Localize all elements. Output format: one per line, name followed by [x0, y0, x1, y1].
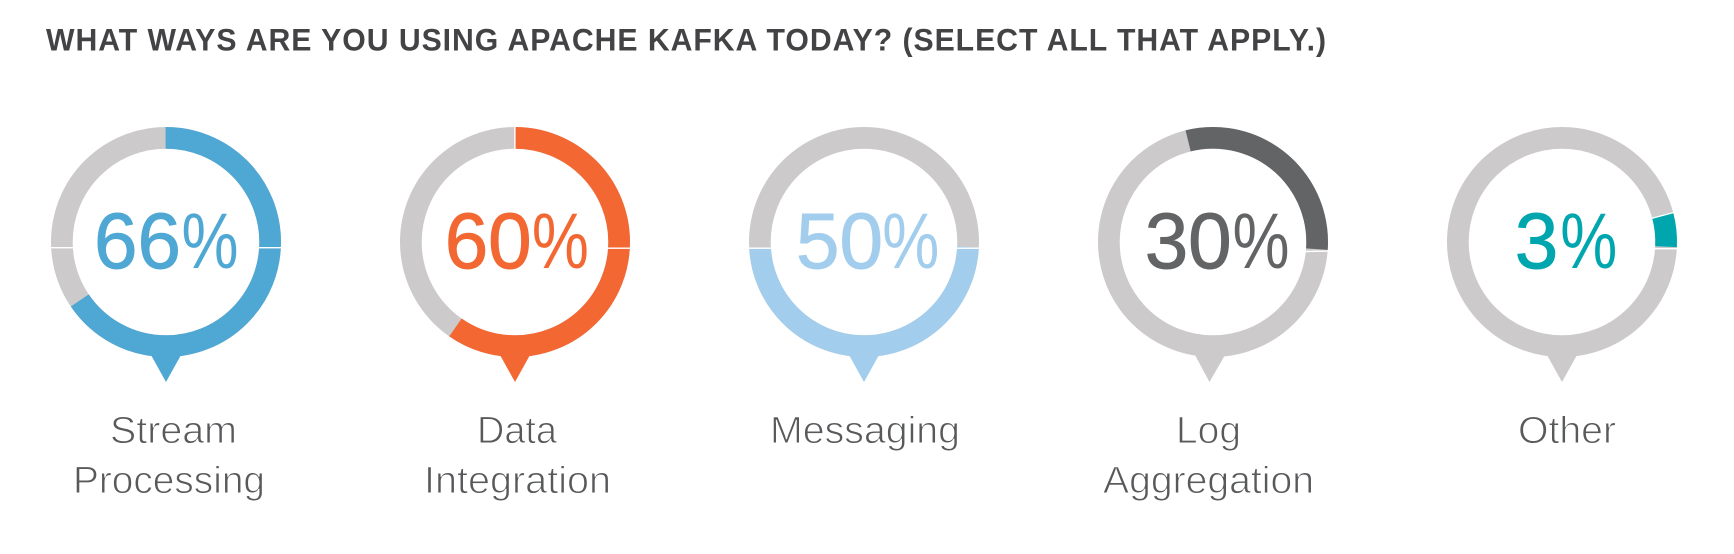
label: data integration: [424, 410, 611, 502]
value: 50%: %: [882, 196, 939, 285]
value: 60%: %: [532, 196, 589, 285]
value: 3%: 3: [1515, 196, 1558, 285]
pointer: other: [1547, 355, 1577, 382]
value: 50%: 50: [796, 196, 883, 285]
value: 30%: 30: [1145, 196, 1232, 285]
label: log aggregation: [1103, 410, 1314, 502]
donut: 30%: [1087, 116, 1339, 368]
value: 3%: [1515, 196, 1617, 285]
label: messaging: Messaging: [770, 410, 960, 452]
value: 3%: %: [1560, 196, 1617, 285]
value: 30%: [1145, 196, 1290, 285]
panel: data integration: [411, 126, 631, 502]
panel: stream processing: [50, 138, 282, 502]
label: data integration: Integration: [424, 460, 611, 502]
label: data integration: Data: [477, 410, 558, 452]
label: stream processing: Stream: [110, 410, 237, 452]
pointer: stream processing: [151, 355, 181, 382]
value: 60%: 60: [445, 196, 532, 285]
label: stream processing: [73, 410, 265, 502]
donut: 3%: [1434, 114, 1690, 370]
value: 60%: [445, 196, 589, 285]
value: 66%: 66: [94, 196, 181, 285]
label: log aggregation: Log: [1176, 410, 1241, 452]
pointer: data integration: [500, 355, 530, 382]
pointer: log aggregation: [1195, 355, 1225, 382]
label: log aggregation: Aggregation: [1103, 460, 1314, 502]
panel: log aggregation: [1087, 116, 1339, 502]
donut: 50%: [748, 133, 980, 351]
value: 66%: %: [182, 196, 238, 285]
title: WHAT WAYS ARE YOU USING APACHE KAFKA TODAY? (SELECT ALL THAT APPLY.): [46, 22, 1327, 58]
value: 30%: %: [1232, 196, 1290, 285]
label: stream processing: Processing: [73, 460, 265, 502]
donut: 66%: [50, 138, 282, 346]
donut: 60%: [411, 126, 631, 346]
label: other: Other: [1518, 410, 1616, 452]
panel: other: [1434, 114, 1690, 452]
panel: messaging: [748, 133, 980, 452]
value: 66%: [94, 196, 238, 285]
pointer: messaging: [849, 355, 879, 382]
value: 50%: [796, 196, 939, 285]
